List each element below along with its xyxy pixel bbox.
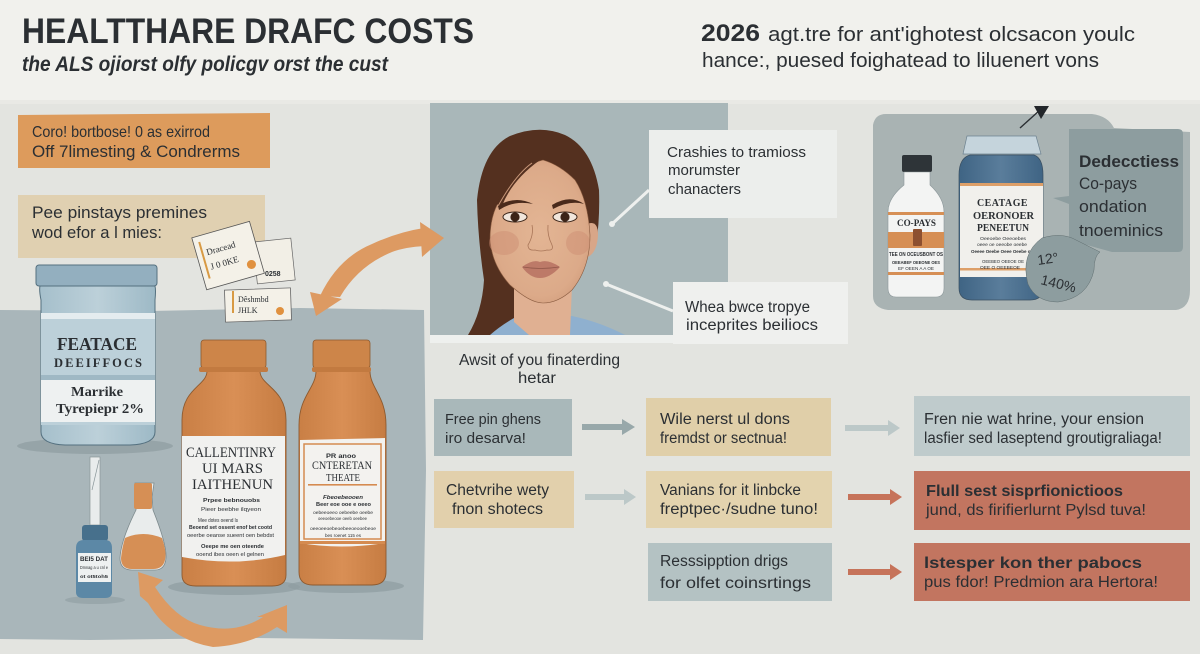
percent badge: 12° [1036, 249, 1059, 268]
eyebrows [498, 200, 533, 210]
arrow [585, 489, 636, 505]
title: HEALTTHARE DRAFC COSTS [22, 12, 474, 51]
header summary text [701, 20, 1135, 72]
header summary text: 2026 [701, 20, 760, 47]
box: fnon shotecs [452, 501, 543, 518]
caption under portrait [459, 352, 620, 387]
icon: tall orange bottle: oebeeoeeo oebeebe oeebe [313, 510, 374, 515]
callout: upper: Crashies to tramioss [667, 144, 806, 161]
icon: tall orange bottle: CNTERETAN [312, 460, 373, 472]
ear [585, 223, 598, 258]
box: Vanians for it linbcke [660, 482, 801, 499]
arrow [845, 420, 900, 436]
box: freptpec·/sudne tuno! [660, 501, 818, 518]
icon: large blue jar: Tyrepiepr 2% [56, 402, 144, 417]
eyes [503, 212, 527, 222]
box: pus fdor! Predmion ara Hertora! [924, 574, 1158, 591]
box: Fren nie wat hrine, your ension [924, 411, 1144, 428]
icon: large orange bottle: Prpee bebnouobs [203, 498, 260, 504]
icon: paper bills: 0258 [265, 271, 281, 278]
arrow [582, 419, 635, 435]
flow row 3 [648, 543, 1190, 601]
icon: small blue vial with stick [65, 457, 125, 604]
icon: blue jar: OEE O OEEBEOE [980, 265, 1020, 270]
icon: tall orange bottle: bes roenet 115 es [325, 533, 362, 538]
percent badge [1026, 235, 1100, 302]
speech bubble: tnoeminics [1079, 221, 1163, 240]
icon: blue jar [959, 136, 1043, 300]
panel: center gray background [430, 103, 728, 335]
lips [522, 261, 560, 278]
illustration: woman portrait [468, 130, 625, 335]
caption under portrait: hetar [518, 370, 556, 387]
icon: white co-pay bottle: EF OEEN A A OE [898, 266, 934, 271]
panel: deductibles and co-pays [873, 106, 1190, 310]
icon: white co-pay bottle [888, 155, 944, 297]
arrow [848, 564, 902, 580]
label: orange note: Off 7limesting & Condrerms [32, 143, 240, 161]
icon: small blue vial with stick: BEI5 DAT [80, 557, 108, 563]
icon: tall orange bottle: Fbeoebeooen [323, 495, 364, 501]
label: orange note: Coro! bortbose! 0 as exirrod [32, 124, 210, 141]
box [646, 398, 831, 456]
callout: lower: inceprites beiliocs [686, 317, 818, 334]
icon: paper bills: JHLK [238, 306, 258, 315]
icon: tall orange bottle: oeeoeeoebeoebeeoeooebeoe [310, 526, 377, 531]
subtitle: the ALS ojiorst olfy policgv orst the cust [22, 53, 389, 76]
box: lstesper kon ther pabocs [924, 555, 1142, 572]
icon: large orange bottle: Oeepe me oen oteende [201, 544, 264, 550]
icon: large blue jar [17, 265, 173, 454]
icon: large orange bottle: Mee dotes oeend ls [198, 518, 238, 524]
callout: upper: morumster [668, 162, 740, 179]
neck [514, 285, 572, 335]
speech bubble: Dedecctiess [1079, 152, 1179, 171]
flow row 2 [434, 471, 1190, 530]
icon: large blue jar: Marrike [71, 385, 123, 400]
icon: small blue vial with stick: Dmnag a u cnl e [80, 565, 108, 570]
box [914, 471, 1190, 530]
box: for olfet coinsrtings [660, 575, 811, 592]
icon: small flask [120, 483, 166, 570]
icon: blue jar: oeee oe oeeobe oeebe [977, 242, 1028, 247]
label: tan note: wod efor a l mies: [31, 224, 162, 242]
shirt [490, 316, 625, 335]
icon: tall orange bottle: PR anoo [326, 453, 356, 460]
icon: blue jar: Oeeee Oeebe Oeee Oeebe oe [971, 249, 1033, 254]
box [646, 471, 832, 528]
box: jund, ds firifierlurnt Pylsd tuva! [925, 502, 1146, 519]
box: iro desarva! [445, 430, 526, 447]
box: Resssipption drigs [660, 553, 788, 570]
box: Free pin ghens [445, 411, 541, 428]
panel: left gray background [0, 308, 426, 640]
percent badge: 140% [1039, 271, 1078, 296]
icon: large blue jar: DEEIFFOCS [54, 356, 142, 370]
icon: paper bills: J 0 0KE [209, 254, 240, 272]
label: tan note [18, 195, 265, 258]
icon: blue jar: Oeeoebe Oeeoebes [980, 236, 1027, 241]
box [434, 399, 572, 456]
label: orange note [18, 113, 270, 168]
callout: upper [609, 130, 837, 227]
icon: large blue jar: FEATACE [57, 334, 137, 354]
box: Flull sest sisprfionictioos [926, 483, 1123, 500]
callout: lower [603, 281, 848, 344]
icon: large orange bottle: Pieer beebhe ilqyeon [201, 507, 261, 513]
icon: large orange bottle: UI MARS [202, 461, 263, 477]
box [434, 471, 574, 528]
icon: tall orange bottle [288, 340, 404, 593]
box: Wile nerst ul dons [660, 411, 790, 428]
header summary text: agt.tre for ant'ighotest olcsacon youlc [768, 24, 1135, 46]
icon: large orange bottle: IAITHENUN [192, 477, 273, 493]
icon: tall orange bottle: Beer eoe ooe e oeeo [316, 502, 371, 508]
icon: large orange bottle: CALLENTINRY [186, 445, 276, 461]
callout: upper: chanacters [668, 181, 741, 198]
hair [468, 130, 599, 335]
speech bubble: Co-pays [1079, 174, 1137, 193]
speech bubble: ondation [1079, 197, 1147, 216]
icon: white co-pay bottle: OEEABEF OEEONE OES [892, 260, 940, 265]
box: fremdst or sectnua! [660, 430, 787, 447]
icon: large orange bottle: ooend ibes oeen el gelnen [196, 552, 264, 558]
icon: paper bills: Dêshmbd [238, 295, 269, 304]
hair strand [496, 160, 540, 206]
face [490, 160, 590, 303]
box [914, 396, 1190, 456]
box: Chetvrihe wety [446, 482, 549, 499]
callout: lower: Whea bwce tropye [685, 299, 810, 316]
icon: white co-pay bottle: TEE ON OCEUSBONT OS [889, 252, 943, 258]
cheek blush [489, 231, 519, 255]
arrow [848, 489, 902, 505]
flow row 1 [434, 396, 1190, 456]
icon: paper bills: Dracead [205, 239, 237, 257]
label: tan note: Pee pinstays premines [32, 204, 207, 222]
icon: blue jar: PENEETUN [977, 223, 1030, 234]
icon: blue jar: OEEBEO OEEOE OE [982, 259, 1024, 264]
nose [528, 225, 552, 251]
box [648, 543, 832, 601]
arrow: curved upper orange double arrow [310, 222, 444, 316]
strip under portrait [430, 335, 675, 343]
speech bubble [1053, 129, 1183, 252]
icon: large orange bottle: Beoend set ossent enof bet cootd [189, 525, 272, 531]
header band [0, 0, 1200, 104]
icon: small arrow [1020, 106, 1049, 128]
box [914, 543, 1190, 601]
icon: paper bills [192, 221, 295, 322]
header summary text: hance:, puesed foighatead to liluenert vons [702, 50, 1099, 72]
icon: blue jar: CEATAGE [977, 198, 1028, 209]
box: lasfier sed laseptend groutigraliaga! [924, 430, 1162, 447]
icon: white co-pay bottle: CO-PAYS [897, 218, 936, 228]
icon: tall orange bottle: oeeoebeooe oeeb oeebee [318, 516, 367, 521]
icon: tall orange bottle: THEATE [326, 473, 360, 484]
arrow: curved lower orange double arrow [138, 572, 287, 647]
icon: blue jar: OERONOER [973, 211, 1035, 222]
icon: large orange bottle [168, 340, 300, 595]
icon: large orange bottle: oeerbe oeanse sueent oen bebdst [187, 533, 274, 539]
icon: small blue vial with stick: ot ot5toh5 [80, 574, 109, 579]
caption under portrait: Awsit of you finaterding [459, 352, 620, 369]
